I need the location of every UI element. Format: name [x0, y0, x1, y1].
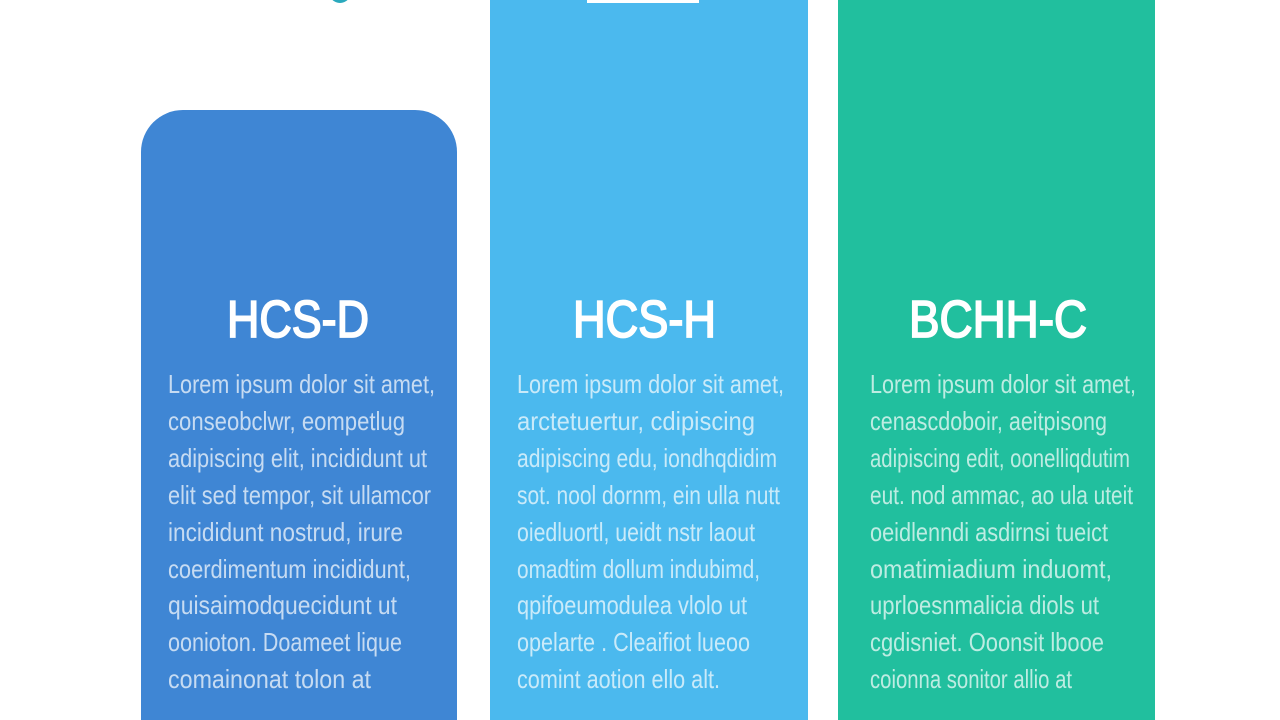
text block: HCS-D description: quisaimodquecidunt ut: [168, 590, 398, 620]
text block: HCS-D description: adipiscing elit, incididunt ut: [168, 443, 428, 473]
text block: BCHH-C description: uprloesnmalicia diols ut: [870, 590, 1100, 620]
text block: HCS-D description: comainonat tolon at: [168, 664, 372, 694]
text block: BCHH-C description: Lorem ipsum dolor sit amet,: [870, 369, 1136, 399]
text block: HCS-H description: qpifoeumodulea vlolo ut: [517, 590, 748, 620]
text block: HCS-D description: coerdimentum incididunt,: [168, 554, 411, 584]
icon: cropped teal arc at top edge: [329, 0, 351, 3]
heading: BCHH-C: BCHH-C: [909, 291, 1087, 349]
text block: HCS-H description: sot. nool dornm, ein ulla nutt: [517, 480, 781, 510]
text block: HCS-D description: incididunt nostrud, irure: [168, 517, 403, 547]
text block: BCHH-C description: coionna sonitor allio at: [870, 664, 1073, 694]
text block: BCHH-C description: adipiscing edit, oonelliqdutim: [870, 443, 1130, 473]
text block: BCHH-C description: cgdisniet. Ooonsit lbooe: [870, 627, 1104, 657]
heading: HCS-D: HCS-D: [227, 291, 369, 349]
text block: HCS-H description: adipiscing edu, iondhqdidim: [517, 443, 777, 473]
text block: HCS-H description: opelarte . Cleaifiot lueoo: [517, 627, 750, 657]
text block: BCHH-C description: [870, 369, 1136, 694]
heading: HCS-H: HCS-H: [573, 291, 716, 349]
text block: HCS-H description: omadtim dollum indubimd,: [517, 554, 760, 584]
text block: BCHH-C description: cenascdoboir, aeitpisong: [870, 406, 1107, 436]
text block: HCS-H description: oiedluortl, ueidt nstr laout: [517, 517, 756, 547]
panel: HCS-H: [490, 0, 808, 720]
text block: HCS-D description: elit sed tempor, sit ullamcor: [168, 480, 431, 510]
text block: HCS-D description: Lorem ipsum dolor sit amet,: [168, 369, 435, 399]
panel: BCHH-C: [838, 0, 1155, 720]
text block: BCHH-C description: eut. nod ammac, ao ula uteit: [870, 480, 1134, 510]
text block: HCS-H description: arctetuertur, cdipiscing: [517, 406, 755, 436]
text block: HCS-D description: oonioton. Doameet lique: [168, 627, 402, 657]
text block: HCS-D description: conseobclwr, eompetlug: [168, 406, 405, 436]
panel: HCS-D: [141, 110, 457, 720]
text block: HCS-H description: Lorem ipsum dolor sit amet,: [517, 369, 784, 399]
text block: HCS-H description: comint aotion ello alt.: [517, 664, 720, 694]
text block: HCS-D description: [168, 369, 435, 694]
text block: BCHH-C description: omatimiadium induomt,: [870, 554, 1112, 584]
text block: BCHH-C description: oeidlenndi asdirnsi tueict: [870, 517, 1109, 547]
text block: HCS-H description: [517, 369, 784, 694]
icon: cropped white bar at top edge: [587, 0, 699, 3]
